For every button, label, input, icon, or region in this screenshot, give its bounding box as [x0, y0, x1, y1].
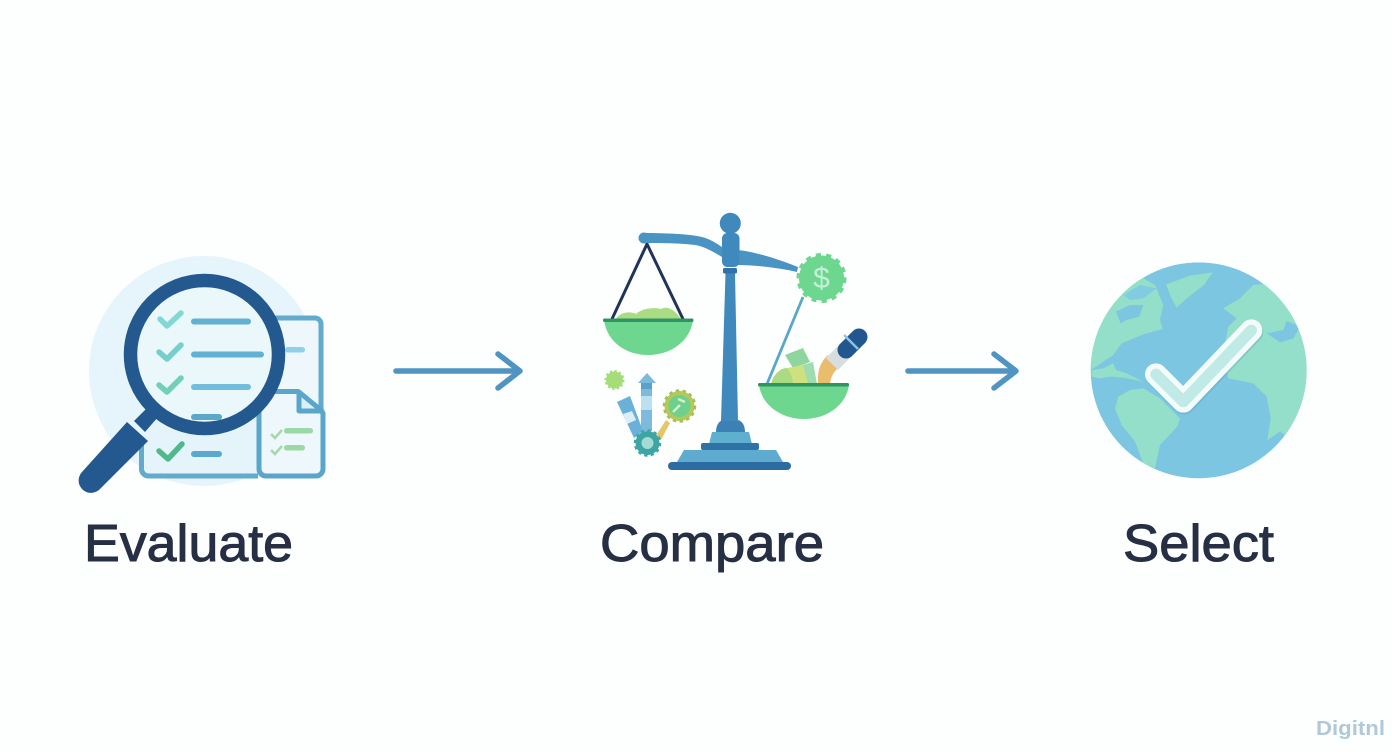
mediterranean water [1267, 321, 1300, 342]
central knob [720, 213, 741, 274]
lens interior [136, 286, 272, 422]
icon: compare balance scale [603, 213, 859, 470]
yellow handle [655, 420, 670, 440]
small green badge [606, 371, 624, 389]
left pan contents [616, 308, 681, 319]
label: Evaluate: Evaluate [84, 515, 293, 573]
pale background circle [89, 256, 319, 486]
check mark [1156, 330, 1252, 403]
watermark: Digitnl [1316, 718, 1385, 740]
left pan strings [612, 244, 683, 319]
left pan [603, 318, 694, 355]
right pan [758, 383, 849, 419]
main checklist document [142, 400, 258, 476]
right pan contents [771, 335, 859, 384]
arctic water [1123, 285, 1157, 300]
teal gear [635, 430, 660, 456]
base [668, 420, 791, 470]
label: Compare: Compare [600, 515, 824, 573]
icon: evaluate magnifier and documents [79, 256, 323, 493]
right pan rod [767, 297, 803, 384]
beam [644, 233, 798, 272]
document lower frame [142, 440, 258, 476]
beam end knob [638, 232, 650, 244]
icon: select globe with check [1080, 262, 1313, 478]
arrow: evaluate to compare [396, 354, 520, 388]
dollar badge [798, 255, 844, 301]
hudson bay water [1116, 305, 1143, 323]
gold and green badge [664, 390, 695, 422]
up arrow bar [638, 373, 656, 431]
magnifier handle [79, 407, 158, 493]
infographic: three step process [78, 212, 1384, 739]
south america [1115, 388, 1180, 468]
central america [1092, 363, 1143, 382]
checklist rows [159, 313, 261, 459]
tube band [623, 411, 636, 424]
globe ocean [1091, 262, 1307, 478]
slanted tube [617, 396, 643, 438]
small document with folded corner [259, 392, 323, 476]
africa and europe [1224, 284, 1307, 440]
arrow: compare to select [908, 354, 1016, 388]
dollar badge: $ [813, 262, 830, 295]
label: Select: Select [1123, 515, 1275, 573]
north america land [1090, 278, 1164, 370]
central column [721, 273, 738, 421]
back document [200, 318, 321, 448]
greenland [1166, 272, 1213, 308]
magnifier ring [130, 280, 278, 428]
small tools cluster [606, 371, 695, 456]
